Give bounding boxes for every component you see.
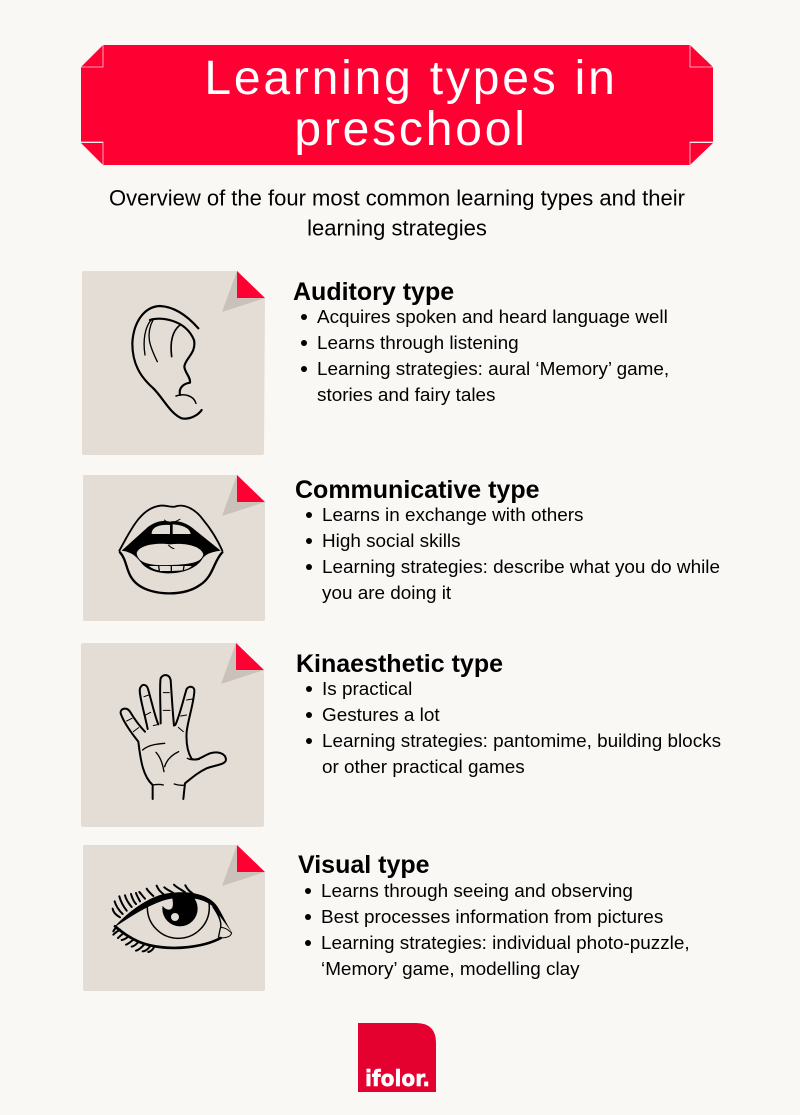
- bullet list: Gestures a lot: [322, 705, 440, 726]
- heading: Kinaesthetic type: [296, 650, 503, 678]
- icon: mouth: [119, 506, 222, 593]
- subtitle: learning strategies: [307, 216, 487, 240]
- eyelashes: [113, 885, 193, 952]
- bullet list: Learning strategies: aural ‘Memory’ game,: [317, 359, 669, 380]
- icon: ear: [132, 306, 202, 419]
- panel: communicative type: [83, 475, 720, 621]
- bullet list: Learns in exchange with others: [322, 505, 583, 526]
- logo: ifolor: [358, 1023, 436, 1092]
- bullet list: Learning strategies: pantomime, building blocks: [322, 731, 721, 752]
- bullet list: Learning strategies: describe what you do while: [322, 557, 720, 578]
- icon: eye: [113, 876, 232, 952]
- bullet list: [305, 881, 690, 980]
- bullet list: [306, 679, 721, 778]
- bullet list: [306, 505, 720, 604]
- note card: [83, 475, 265, 621]
- bullet list: stories and fairy tales: [317, 385, 496, 406]
- heading: Visual type: [298, 851, 430, 879]
- logo: ifolor: ifolor.: [365, 1067, 430, 1092]
- bullet list: ‘Memory’ game, modelling clay: [321, 959, 580, 980]
- subtitle: [109, 186, 685, 240]
- icon: hand: [121, 675, 226, 799]
- title text: preschool: [294, 103, 528, 156]
- bullet list: Is practical: [322, 679, 412, 700]
- note card: [82, 271, 265, 455]
- note card: [83, 845, 265, 991]
- bullet list: Best processes information from pictures: [321, 907, 663, 928]
- bullet list: or other practical games: [322, 757, 525, 778]
- bullet list: Acquires spoken and heard language well: [317, 307, 668, 328]
- bullet list: Learns through listening: [317, 333, 519, 354]
- panel: kinaesthetic type: [81, 643, 721, 827]
- title text: Learning types in: [204, 52, 618, 105]
- title banner: [81, 45, 713, 165]
- bullet list: High social skills: [322, 531, 461, 552]
- bullet list: you are doing it: [322, 583, 452, 604]
- bullet list: Learning strategies: individual photo-puzzle,: [321, 933, 690, 954]
- note card: [81, 643, 264, 827]
- subtitle: Overview of the four most common learning types and their: [109, 186, 685, 210]
- panel: visual type: [83, 845, 690, 991]
- panel: auditory type: [82, 271, 669, 455]
- heading: Auditory type: [293, 278, 454, 306]
- bullet list: [301, 307, 669, 406]
- heading: Communicative type: [295, 476, 540, 504]
- bullet list: Learns through seeing and observing: [321, 881, 633, 902]
- title text: [204, 52, 618, 156]
